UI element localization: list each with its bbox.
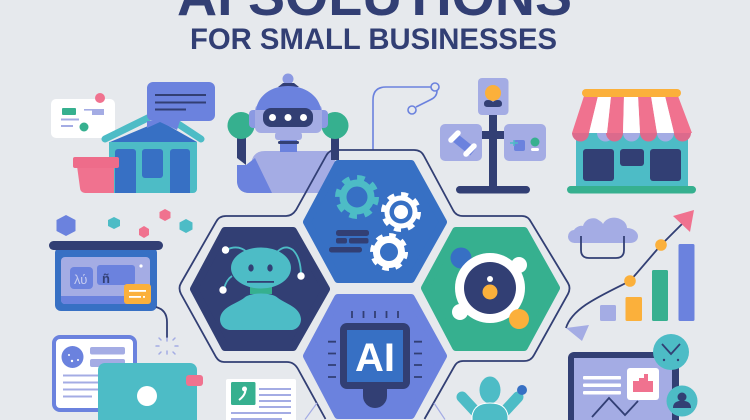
hexagon outline	[180, 150, 570, 419]
chip pins	[328, 311, 422, 377]
icon: white gear large	[384, 194, 418, 230]
icon: storefront	[567, 89, 696, 194]
icon: teal gear	[338, 178, 376, 216]
subtitle: FOR SMALL BUSINESSES	[190, 23, 557, 56]
icon: white gear small	[372, 236, 406, 268]
icon: robot	[228, 74, 348, 193]
top tile	[478, 78, 508, 115]
icon: document	[226, 379, 296, 420]
bricks	[329, 230, 369, 252]
panel: target hexagon	[425, 231, 556, 347]
icon: house with chat bubble	[73, 82, 215, 193]
small hexagons	[56, 209, 192, 238]
connector lines	[305, 403, 445, 420]
house roof	[105, 112, 201, 139]
shop body	[576, 130, 688, 188]
bar chart	[600, 244, 694, 321]
icon: presentation board: ñ	[102, 271, 110, 286]
icon: presentation board: λύ	[74, 272, 87, 287]
chip label: AI	[355, 336, 395, 380]
chip stem	[363, 385, 387, 408]
icon: note card	[51, 93, 115, 138]
badge: user	[666, 386, 698, 416]
trend arrow	[566, 210, 694, 341]
icon: profile card	[54, 337, 135, 410]
right tile	[504, 124, 546, 161]
flower pot	[73, 157, 119, 193]
icon: monitor	[568, 334, 698, 420]
panel: AI avatar hexagon	[194, 231, 326, 347]
house body	[109, 142, 197, 193]
icon: cloud with basket	[568, 218, 638, 258]
badge: check	[653, 334, 689, 370]
panel: gears hexagon	[307, 164, 443, 279]
icon: signpost with tiles	[440, 78, 546, 194]
icon: teal person	[462, 376, 527, 420]
chat bubble	[147, 82, 215, 130]
circuit line	[373, 83, 439, 150]
awning	[572, 89, 692, 142]
icon: presentation board	[49, 241, 163, 311]
panel: AI chip hexagon	[307, 298, 443, 415]
antennas	[224, 247, 301, 289]
icon: teal tablet	[98, 363, 203, 420]
avatar	[220, 248, 301, 330]
left tile	[440, 124, 482, 161]
cable and spark	[156, 307, 178, 354]
